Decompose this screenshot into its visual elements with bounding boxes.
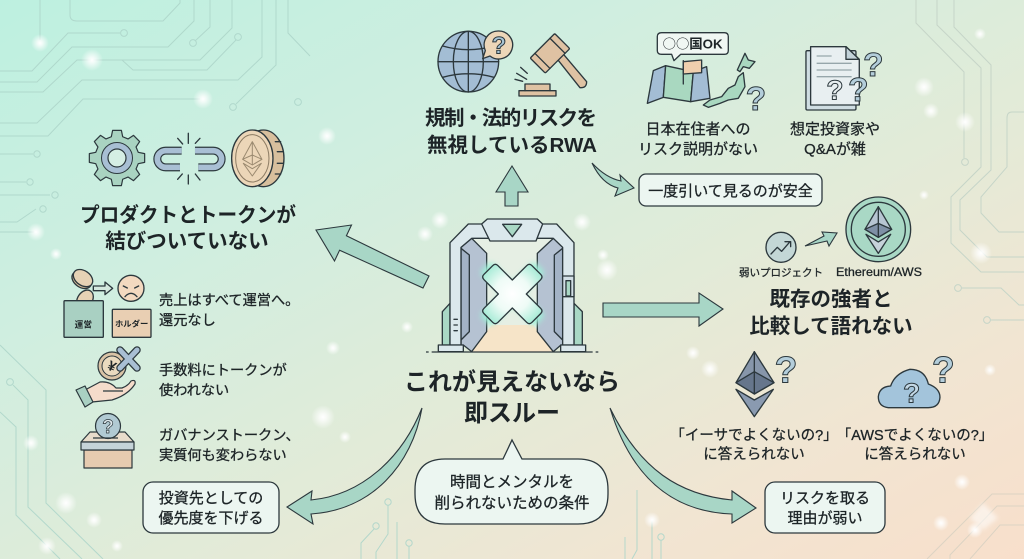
icon: document with question marks: ? <box>863 47 883 84</box>
icon: ethereum badge <box>846 197 911 262</box>
text: governance: ガバナンストークン、 <box>159 428 300 444</box>
icon: globe: ? <box>492 32 506 59</box>
callout: weak reason: 理由が弱い <box>787 510 863 527</box>
panel: can't answer why not AWS <box>837 349 993 463</box>
arrow: to left panel <box>316 225 429 288</box>
icon: document with question marks: ? <box>848 72 868 109</box>
callout: condition speech bubble: 削られないための条件 <box>434 494 590 512</box>
panel: can't answer why not Ether <box>670 349 838 463</box>
icon: broken chain <box>157 133 222 184</box>
icon: ballot box: ? <box>102 417 114 438</box>
callout: lower priority: 投資先としての <box>159 490 263 507</box>
heading line 2: 比較して語れない <box>749 315 913 338</box>
text: no explanation: 日本在住者への <box>645 121 751 138</box>
icon: cloud with question: ? <box>903 378 920 409</box>
icon: gear <box>89 130 145 186</box>
heading: 既存の強者と <box>770 288 892 311</box>
icon: map and Japan: ○○国OK <box>663 34 723 53</box>
text: no explanation line 2: リスク説明がない <box>638 141 758 158</box>
panel: product and token not linked <box>64 130 300 468</box>
heading: プロダクトとトークンが <box>80 203 296 227</box>
icon: cloud with question <box>878 349 955 409</box>
text: governance line 2: 実質何も変わらない <box>159 447 287 464</box>
label: weak project: 弱いプロジェクト <box>739 267 823 279</box>
panel: compare with incumbents <box>739 197 922 338</box>
arrow: small <box>805 232 837 246</box>
icon: ethereum coin <box>232 130 284 187</box>
icon: weak project <box>766 232 796 262</box>
icon: ballot box <box>81 414 134 468</box>
icon: cloud with question: ? <box>932 349 955 391</box>
icon: revenue boxes: 運営 <box>75 318 92 329</box>
text line 2: に答えられない <box>703 446 805 463</box>
text: revenue line 2: 還元なし <box>159 313 216 329</box>
main heading line 2: 即スルー <box>464 400 560 427</box>
text: 「イーサでよくないの?」 <box>670 427 838 444</box>
callout: condition speech bubble <box>415 440 608 524</box>
callout: weak reason: リスクを取る <box>780 490 870 507</box>
icon: revenue boxes: ホルダー <box>115 319 148 329</box>
arrow: to safe callout <box>592 163 634 196</box>
icon: gavel <box>515 34 587 96</box>
arrow: to lower-priority callout <box>287 408 422 524</box>
icon: hand with token <box>76 350 137 407</box>
panel: regulation <box>425 31 597 157</box>
arrow: to right panel <box>603 293 723 326</box>
icon: map and Japan <box>647 33 766 118</box>
text: fees line 2: 使われない <box>159 382 229 399</box>
icon: globe <box>438 31 513 92</box>
callout: lower priority <box>143 482 279 533</box>
panel: sloppy Q&A <box>790 47 883 158</box>
heading: 規制・法的リスクを <box>425 107 597 130</box>
text: 「AWSでよくないの?」 <box>837 427 993 444</box>
callout: step back <box>639 174 822 206</box>
icon: hand with token: ¥ <box>105 357 119 375</box>
heading line 2: 無視しているRWA <box>427 134 597 157</box>
text: investors line 2: Q&Aが雑 <box>804 141 866 158</box>
icon: document with question marks: ? <box>826 74 844 105</box>
label: Ethereum/AWS: Ethereum/AWS <box>836 265 922 279</box>
callout: condition speech bubble: 時間とメンタルを <box>450 473 574 491</box>
heading line 2: 結びついていない <box>105 230 269 253</box>
callout: weak reason <box>765 482 885 533</box>
text: revenue: 売上はすべて運営へ。 <box>159 293 299 309</box>
panel: no risk explanation <box>638 33 766 158</box>
arrow: to weak-reason callout <box>610 408 756 523</box>
text: fees: 手数料にトークンが <box>159 363 287 379</box>
callout: step back: 一度引いて見るのが安全 <box>648 183 813 200</box>
main heading: これが見えないなら <box>404 368 620 396</box>
icon: revenue boxes <box>64 266 151 337</box>
text: investors: 想定投資家や <box>790 121 880 138</box>
icon: ethereum with question <box>736 349 797 417</box>
icon: document with question marks <box>806 47 883 110</box>
arrow: up <box>496 166 528 206</box>
text line 2: に答えられない <box>864 446 966 463</box>
icon: ethereum with question: ? <box>775 349 797 391</box>
illustration: gate with X <box>426 219 598 352</box>
icon: map and Japan: ? <box>746 81 766 118</box>
callout: lower priority: 優先度を下げる <box>158 510 264 527</box>
